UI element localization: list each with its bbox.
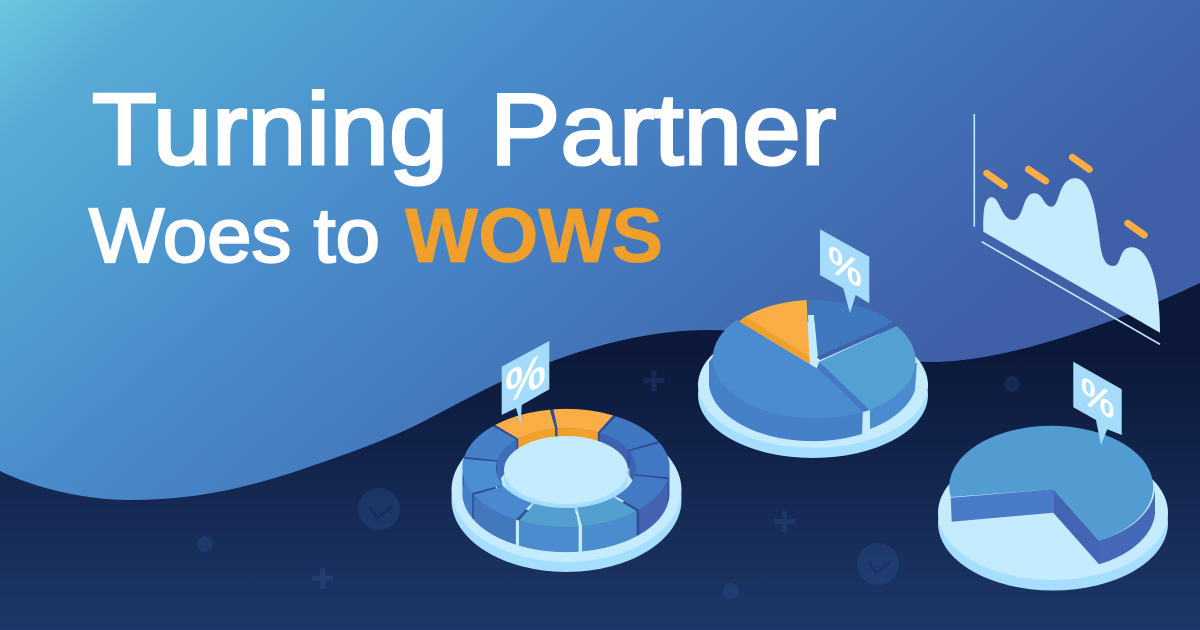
decorative background icons bbox=[197, 370, 1020, 599]
chart axes bbox=[974, 114, 1160, 344]
segment: orange right bbox=[553, 409, 613, 432]
pie chart: centre bbox=[698, 229, 928, 458]
divider between large and light slices bbox=[817, 362, 870, 412]
percent tag: centre pie bbox=[820, 229, 869, 313]
segment: orange left bbox=[495, 410, 555, 439]
title line 2: Woes to bbox=[89, 193, 380, 279]
title line 1: Partner bbox=[490, 74, 836, 186]
percent tag: centre pie: % bbox=[828, 236, 862, 297]
title line 1 bbox=[92, 74, 836, 186]
percent tag: right pie: % bbox=[1081, 367, 1115, 429]
slice: light blue bbox=[819, 326, 917, 429]
percent tag: ring: % bbox=[505, 343, 546, 415]
percent tag: right pie bbox=[1073, 362, 1122, 445]
donut ring chart bbox=[452, 341, 682, 572]
decor: check badge right bbox=[857, 543, 899, 585]
sliver between slices bbox=[808, 315, 817, 367]
slice: dark blue bbox=[808, 300, 897, 360]
decor: dot bottom bbox=[723, 583, 739, 599]
decor: plus lower left bbox=[312, 568, 333, 589]
background: dark wave bbox=[0, 283, 1200, 630]
chart area bbox=[983, 178, 1160, 333]
decor: plus bbox=[644, 370, 664, 391]
title line 1: Turning bbox=[92, 74, 448, 186]
pie base platter bbox=[698, 322, 928, 458]
ring segment tops bbox=[462, 409, 670, 527]
decor: dot bbox=[1004, 376, 1020, 392]
decor: dot left bbox=[197, 536, 213, 552]
pie chart: right bbox=[938, 362, 1168, 590]
ring centre disc bbox=[504, 436, 628, 512]
title line 2 bbox=[89, 193, 663, 279]
pie base platter bbox=[938, 446, 1168, 590]
slice: orange bbox=[739, 300, 810, 364]
title line 2: WOWS bbox=[405, 193, 663, 279]
decor: check badge left bbox=[358, 488, 400, 530]
title bbox=[89, 74, 836, 279]
pie walls bbox=[951, 489, 1155, 564]
ring inner floor bbox=[495, 451, 637, 515]
decor: plus centre bbox=[774, 511, 795, 532]
slice: large blue bbox=[709, 320, 863, 441]
ring silhouette bbox=[462, 409, 670, 552]
ring segment sides bbox=[462, 428, 670, 552]
pie top face bbox=[949, 426, 1153, 541]
chart markers bbox=[987, 157, 1144, 235]
line chart: area with markers bbox=[974, 114, 1160, 344]
ring base platter bbox=[452, 418, 682, 572]
